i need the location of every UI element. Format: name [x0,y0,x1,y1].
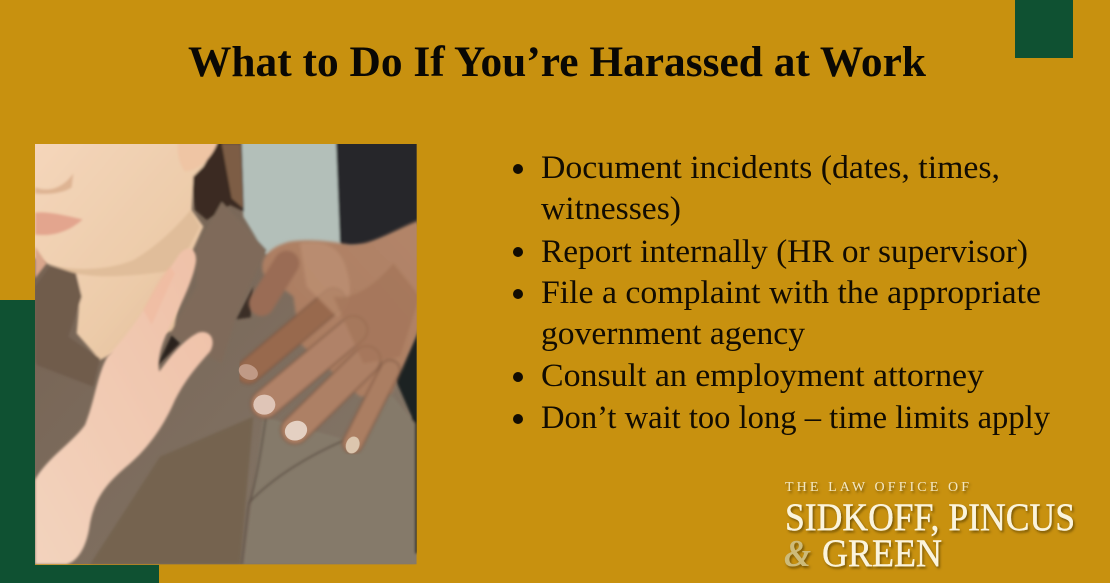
nose shadow [35,173,73,194]
jaw shadow [50,210,200,276]
law office logo: & [784,533,811,575]
man's jacket [336,140,420,245]
bullet: document incidents [513,150,1000,227]
face and neck [32,140,218,360]
bullet: file a complaint: government agency [541,316,806,352]
bullet: report internally: Report internally (HR or supervisor) [541,234,1028,270]
photo: man's hand on a woman's shoulder [35,144,417,564]
bullet: file a complaint: File a complaint with the appropriate [541,275,1041,311]
law office logo: THE LAW OFFICE OF [785,480,969,495]
bullet: document incidents: Document incidents (dates, times, [541,150,1000,186]
shirt collar right [172,201,268,338]
left collar [35,267,100,387]
green L-shaped block: bottom left [0,300,159,583]
law office logo: SIDKOFF, PINCUS [785,496,1075,539]
woman's hand [35,247,213,564]
bullet: consult an attorney: Consult an employment attorney [541,358,985,394]
bullet list [513,150,1050,436]
man's fingernails [236,361,362,455]
green corner block: top right [1015,0,1073,58]
wall [238,140,341,255]
shoulder lighter fabric [243,393,415,564]
bullet: document incidents: witnesses) [541,191,681,227]
seam lines [242,417,345,564]
law office logo [784,480,1075,575]
hair [187,140,244,220]
lips [35,212,83,235]
man's hand [236,220,420,455]
ear [179,144,220,170]
bullet: file a complaint [513,275,1041,352]
bullet: don't wait too long: Don’t wait too long – time limits apply [541,400,1050,436]
title: What to Do If You’re Harassed at Work [188,39,926,86]
law office logo: GREEN [822,532,942,575]
